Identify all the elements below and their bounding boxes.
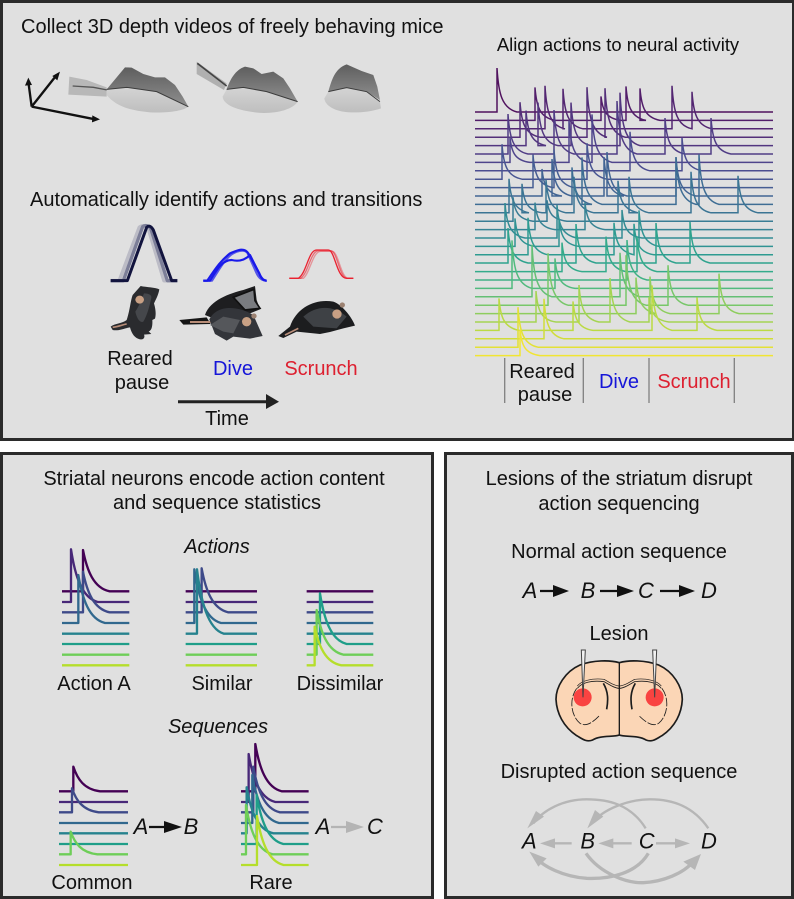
chart group: sequences — [59, 744, 309, 865]
label: reared pause: Reared — [107, 348, 173, 370]
sequence: A to B — [132, 814, 198, 839]
heading: identify actions: Automatically identify actions and transitions — [30, 189, 422, 211]
label: lesion: Lesion — [590, 623, 648, 645]
depth mouse 2 — [197, 62, 298, 113]
traces: reared pause — [111, 226, 177, 281]
sequence: A to B: A — [132, 814, 148, 839]
raster label: dive: Dive — [599, 371, 639, 393]
icon: coronal brain section with lesions — [556, 650, 682, 741]
label: action A: Action A — [57, 673, 131, 695]
raster label: reared pause: pause — [518, 384, 572, 406]
label: scrunch: Scrunch — [284, 358, 358, 380]
arrow: time — [178, 394, 279, 409]
normal sequence diagram: B — [581, 578, 595, 603]
heading: lesions: Lesions of the striatum disrupt — [486, 468, 752, 490]
panel: striatal neurons — [2, 454, 432, 898]
heading: normal sequence: Normal action sequence — [511, 541, 727, 563]
disrupted sequence diagram: D — [701, 828, 717, 853]
traces: dive — [203, 250, 267, 281]
normal sequence diagram — [521, 578, 717, 603]
disrupted sequence diagram: A — [520, 828, 537, 853]
disrupted sequence diagram — [520, 799, 717, 883]
heading: striatal neurons: Striatal neurons encode action content — [43, 468, 385, 490]
icon: reared mouse — [111, 286, 159, 339]
sequence: A to C: A — [314, 814, 330, 839]
normal sequence diagram: A — [521, 578, 537, 603]
raster label: scrunch: Scrunch — [657, 371, 731, 393]
panel: behaviour and neural activity — [2, 2, 794, 440]
heading: disrupted sequence: Disrupted action sequence — [501, 761, 737, 783]
sequence: A to C — [314, 814, 383, 839]
neural traces raster — [475, 68, 773, 356]
heading: align actions: Align actions to neural activity — [497, 34, 740, 55]
label: rare: Rare — [249, 872, 293, 894]
panel: lesions — [446, 454, 792, 898]
label: time: Time — [205, 408, 249, 430]
sequence: A to B: B — [184, 814, 198, 839]
depth mouse 1 — [68, 67, 188, 113]
sequence: A to C: C — [367, 814, 383, 839]
label: dissimilar: Dissimilar — [297, 673, 384, 695]
heading: collect depth videos: Collect 3D depth videos of freely behaving mice — [21, 16, 443, 38]
chart: action A — [62, 549, 129, 665]
icon: scrunch mouse — [278, 301, 355, 338]
normal sequence diagram: C — [638, 578, 654, 603]
subheading: sequences: Sequences — [168, 716, 268, 738]
raster label: reared pause: Reared — [509, 361, 575, 383]
traces: scrunch — [289, 250, 353, 278]
chart group: actions — [62, 549, 373, 665]
label: common: Common — [51, 872, 133, 894]
chart: similar — [186, 568, 257, 665]
label: similar: Similar — [191, 673, 253, 695]
heading: lesions: action sequencing — [538, 493, 700, 515]
label: reared pause: pause — [115, 372, 169, 394]
label: dive: Dive — [213, 358, 253, 380]
heading: striatal neurons: and sequence statistics — [113, 492, 321, 514]
chart: dissimilar — [307, 591, 373, 665]
disrupted sequence diagram: C — [639, 828, 655, 853]
chart: common — [59, 767, 128, 865]
icon: 3D axes — [25, 72, 100, 122]
normal sequence diagram: D — [701, 578, 717, 603]
subheading: actions: Actions — [183, 536, 250, 558]
chart: rare — [241, 744, 309, 865]
syllable traces and mice — [111, 226, 355, 341]
depth mouse 3 — [324, 64, 381, 112]
icon: dive mouse — [179, 286, 263, 341]
syllable dividers — [505, 358, 734, 403]
disrupted sequence diagram: B — [580, 828, 595, 853]
